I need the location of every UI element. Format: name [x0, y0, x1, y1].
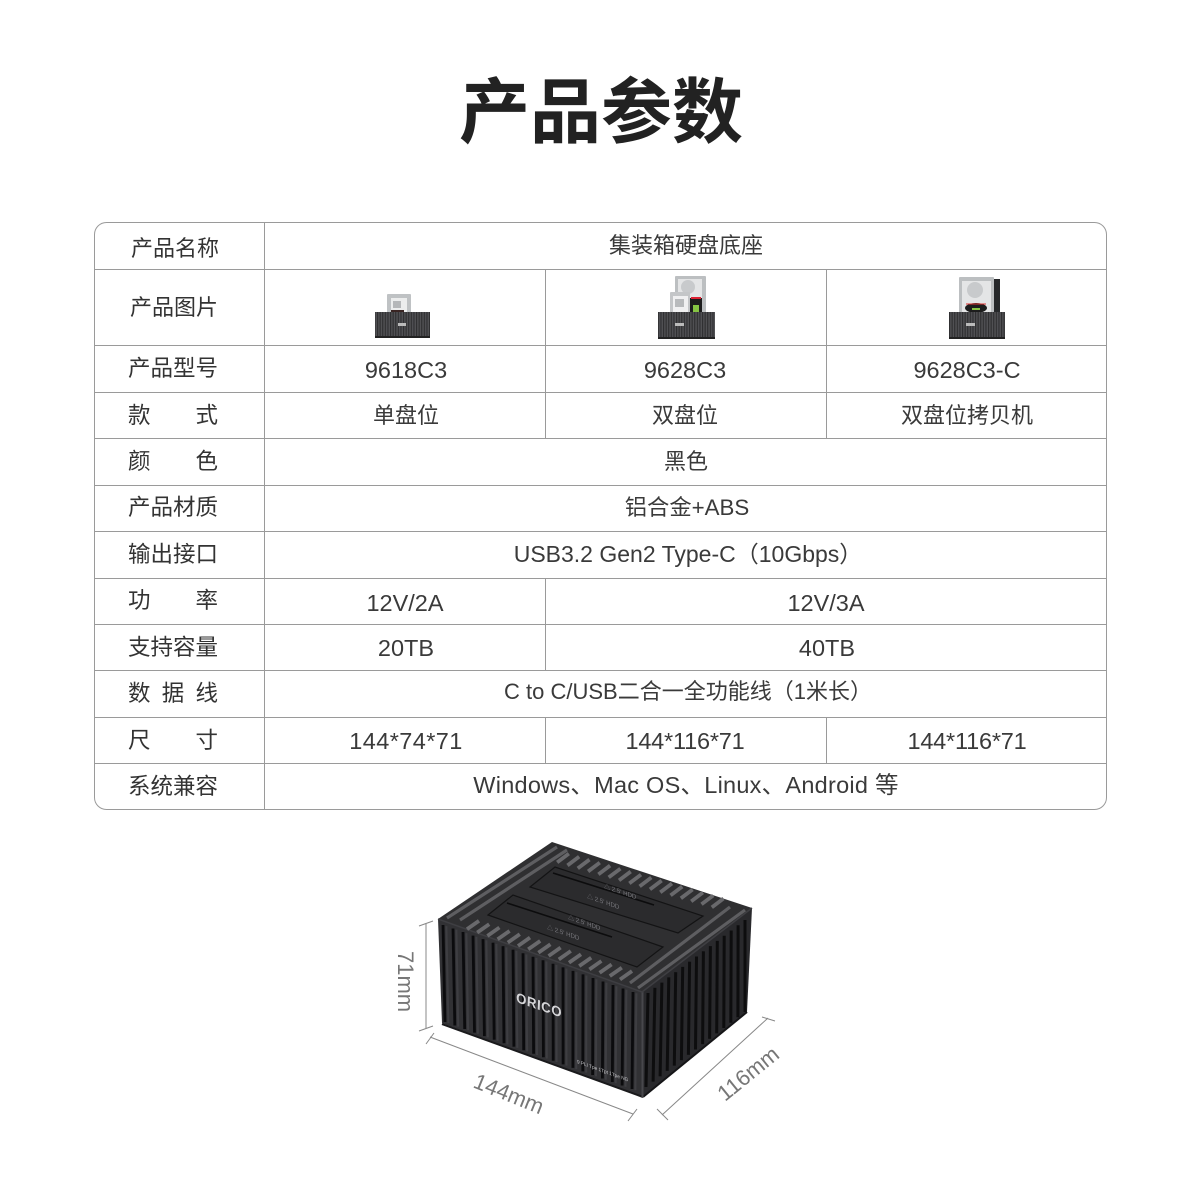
row label: style — [128, 403, 218, 428]
dimension: width 144mm — [426, 1033, 637, 1121]
row label: product name — [131, 236, 219, 261]
row label: capacity: 持 — [151, 635, 173, 660]
device: drive bay front: △ 2.5' HDD — [547, 922, 580, 942]
value: dual bay: 双盘位 — [652, 403, 718, 428]
row label: material: 质 — [196, 495, 218, 520]
row label: style: 式 — [195, 403, 218, 428]
row label: style: 款 — [128, 403, 151, 428]
row label: dimensions: 寸 — [195, 728, 218, 753]
row label: output port: 输 — [128, 542, 151, 567]
row label: compatibility: 统 — [151, 774, 173, 799]
value: model 9628C3-C: 9628C3-C — [913, 357, 1021, 383]
row label: product image: 片 — [196, 295, 218, 320]
row label: product name: 名 — [175, 236, 197, 261]
device: front face — [438, 919, 643, 1097]
device: top face — [438, 842, 752, 992]
row label: data cable — [128, 681, 218, 706]
device: drive bay front: △ 2.5' HDD — [568, 912, 601, 932]
device: drive bay back — [530, 867, 703, 933]
row label: model: 产 — [128, 356, 151, 381]
row label: data cable: 线 — [195, 681, 218, 706]
row label: model: 品 — [151, 356, 173, 381]
device: drive bay back: △ 2.5' HDD — [587, 891, 620, 911]
value: power 12V/2A: 12V/2A — [366, 590, 444, 616]
device: logo: ORICO — [516, 989, 562, 1021]
value: model 9618C3: 9618C3 — [365, 357, 447, 383]
value: compatibility: Windows、Mac OS、Linux、Android 等 — [473, 772, 899, 798]
row label: data cable: 数 — [128, 681, 151, 706]
row label: material: 产 — [128, 495, 151, 520]
row label: compatibility: 容 — [196, 774, 218, 799]
row label: capacity: 容 — [173, 635, 196, 660]
value: capacity 40TB: 40TB — [799, 635, 855, 661]
title: 产品参数 — [459, 74, 743, 153]
row label: model: 型 — [173, 356, 196, 381]
value: material: 铝合金+ABS — [625, 495, 749, 520]
row label: compatibility: 兼 — [173, 774, 196, 799]
row label: output port: 接 — [173, 542, 196, 567]
row label: output port — [128, 542, 218, 567]
row label: colour: 颜 — [128, 449, 151, 474]
device: port labels: 9 PLI Tpe 1Tpt 1Tpe NG — [577, 1059, 628, 1084]
row label: capacity: 量 — [196, 635, 218, 660]
value: single bay: 单盘位 — [373, 403, 439, 428]
row label: product name: 产 — [131, 236, 153, 261]
row label: product image — [130, 295, 218, 320]
value: dimensions dual: 144*116*71 — [625, 728, 745, 754]
row label: material — [128, 495, 218, 520]
row label: compatibility — [128, 774, 218, 799]
row label: product image: 品 — [152, 295, 174, 320]
row label: capacity: 支 — [128, 635, 151, 660]
row label: material: 品 — [151, 495, 173, 520]
row label: dimensions — [128, 728, 218, 753]
value: output port: USB3.2 Gen2 Type-C（10Gbps） — [514, 541, 862, 567]
row label: colour — [128, 449, 218, 474]
row label: product image: 图 — [174, 295, 196, 320]
row label: power: 率 — [195, 588, 218, 613]
value: capacity 20TB: 20TB — [378, 635, 434, 661]
value: product name: 集装箱硬盘底座 — [609, 233, 763, 258]
dimension: height 71mm: 71mm — [393, 951, 418, 1012]
row label: data cable: 据 — [162, 681, 184, 706]
value: dual bay copier: 双盘位拷贝机 — [901, 403, 1033, 428]
row label: material: 材 — [173, 495, 196, 520]
value: model 9628C3: 9628C3 — [644, 357, 726, 383]
row label: output port: 口 — [196, 542, 218, 567]
device: right face — [642, 908, 752, 1097]
row label: product image: 产 — [130, 295, 152, 320]
value: data cable: C to C/USB二合一全功能线（1米长） — [504, 679, 872, 704]
value: power 12V/3A: 12V/3A — [787, 590, 865, 616]
row label: dimensions: 尺 — [128, 728, 151, 753]
row label: power: 功 — [128, 588, 151, 613]
row label: power — [128, 588, 218, 613]
dimension: width 144mm: 144mm — [470, 1068, 548, 1119]
row label: colour: 色 — [195, 449, 218, 474]
row label: capacity — [128, 635, 218, 660]
dimension: depth 116mm — [657, 1017, 784, 1120]
row label: model: 号 — [196, 356, 218, 381]
row label: compatibility: 系 — [128, 774, 151, 799]
value: colour: 黑色 — [664, 449, 708, 474]
row label: model — [128, 356, 218, 381]
value: dimensions copier: 144*116*71 — [907, 728, 1027, 754]
dimension: depth 116mm: 116mm — [712, 1041, 784, 1106]
row label: product name: 称 — [197, 236, 219, 261]
dimension: height 71mm — [393, 921, 433, 1031]
row label: product name: 品 — [153, 236, 175, 261]
value: dimensions single: 144*74*71 — [349, 728, 463, 754]
device: drive bay front — [488, 895, 663, 967]
device: drive bay back: △ 2.5' HDD — [604, 881, 637, 901]
row label: output port: 出 — [151, 542, 173, 567]
